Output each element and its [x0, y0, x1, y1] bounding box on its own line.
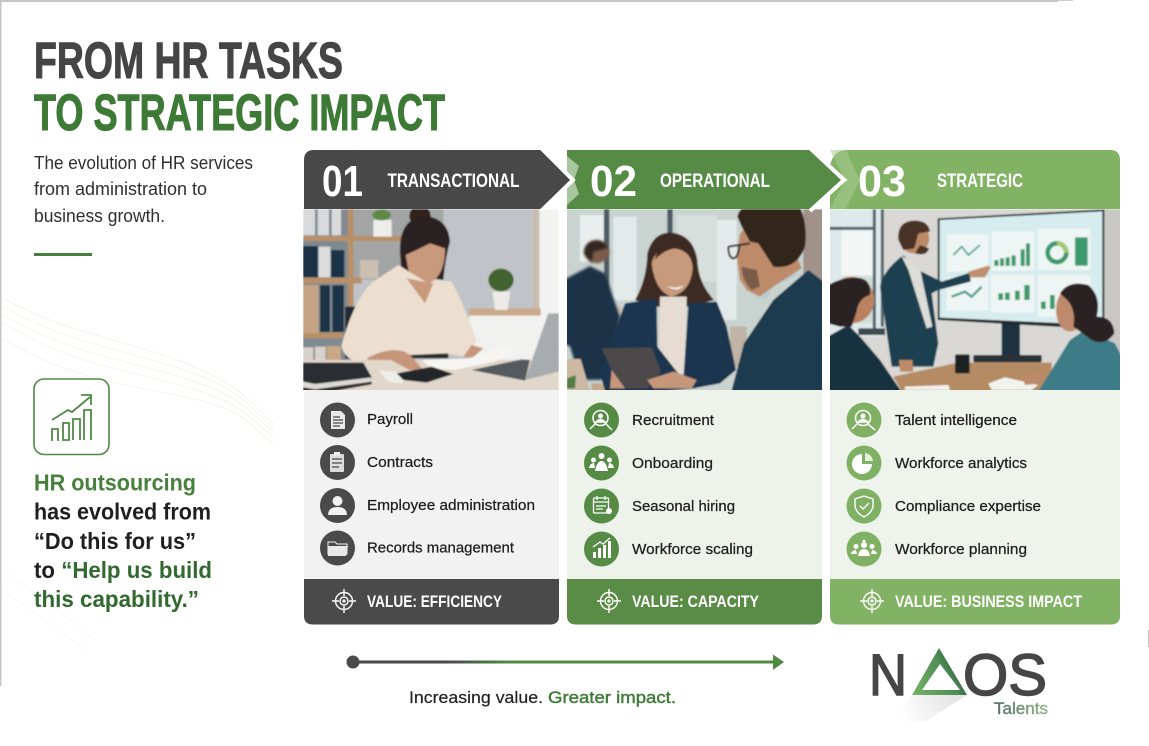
value bar 3 [830, 579, 1120, 624]
list: operational services: Workforce scaling [632, 541, 753, 558]
icon: records folder [320, 530, 355, 566]
caption: increasing value: Greater impact. [548, 688, 676, 707]
icon: analytics pie [846, 446, 882, 480]
icon: workforce scaling [584, 532, 619, 566]
value bar 3: VALUE: BUSINESS IMPACT [895, 592, 1083, 611]
panel: 01 transactional [295, 148, 573, 624]
callout: evolution quote: has evolved from [34, 498, 211, 524]
logo: NAOS Talents [869, 643, 1048, 722]
photo: interview with tablet [567, 209, 822, 390]
list: strategic services: Compliance expertise [895, 498, 1041, 515]
title [34, 32, 445, 141]
header 2: OPERATIONAL [660, 171, 770, 192]
list: strategic services: Workforce analytics [895, 455, 1027, 472]
value bar 1: VALUE: EFFICIENCY [367, 592, 503, 611]
body panel 3 [830, 389, 1120, 579]
subtitle [34, 153, 253, 226]
list: strategic services: Talent intelligence [895, 412, 1017, 429]
list: transactional services [320, 402, 535, 566]
photo: woman with calculator [303, 209, 559, 390]
header 2 [567, 148, 844, 211]
list: strategic services: Workforce planning [895, 541, 1027, 558]
list: transactional services: Contracts [367, 454, 433, 471]
accent rule [34, 253, 92, 256]
subtitle: business growth. [34, 206, 165, 226]
arrow: increasing value [346, 654, 784, 670]
panel: 03 strategic [822, 150, 1128, 624]
callout: evolution quote: HR outsourcing [34, 470, 196, 496]
background wave lines [2, 298, 274, 650]
value bar 1 [304, 579, 559, 624]
header 3: 03 [858, 157, 906, 206]
header 3 [830, 150, 1120, 209]
icon: talent intelligence [846, 402, 882, 438]
list: operational services [584, 402, 753, 566]
panel: 02 operational [557, 148, 844, 624]
logo: NAOS Talents: Talents [994, 699, 1048, 718]
list: operational services: Onboarding [632, 455, 713, 472]
header 2: 02 [590, 157, 637, 206]
callout: evolution quote: this capability.” [34, 586, 199, 612]
icon: onboarding team [584, 446, 619, 480]
body panel 1 [304, 389, 559, 579]
list: operational services: Seasonal hiring [632, 498, 735, 515]
value bar 2 [567, 579, 822, 624]
header 3: STRATEGIC [937, 171, 1023, 192]
value bar 2: VALUE: CAPACITY [632, 592, 760, 611]
title: TO STRATEGIC IMPACT [34, 84, 445, 141]
header 1 [304, 148, 573, 211]
subtitle: The evolution of HR services [34, 153, 253, 173]
icon: compliance shield [846, 488, 882, 524]
header 1: 01 [322, 157, 363, 206]
logo: NAOS Talents: N [869, 643, 907, 708]
icon: contracts clipboard [320, 445, 355, 480]
icon: workforce planning [846, 532, 882, 566]
caption: increasing value [409, 688, 676, 707]
callout: evolution quote: “Do this for us” [34, 528, 196, 554]
list: transactional services: Payroll [367, 411, 413, 428]
icon: employee person [320, 488, 355, 523]
caption: increasing value: Increasing value. [409, 688, 543, 707]
body panel 2 [567, 389, 822, 579]
list: strategic services [846, 402, 1041, 566]
header 1: TRANSACTIONAL [388, 171, 520, 192]
subtitle: from administration to [34, 179, 207, 199]
title: FROM HR TASKS [34, 32, 343, 89]
list: transactional services: Records management [367, 540, 515, 556]
icon: recruitment search [584, 402, 619, 438]
icon: seasonal calendar [584, 488, 619, 524]
list: operational services: Recruitment [632, 412, 715, 429]
icon: growth chart [34, 379, 109, 454]
icon: payroll document [320, 402, 355, 438]
photo: presenter at dashboard screen [830, 209, 1120, 390]
logo: NAOS Talents: OS [963, 643, 1047, 708]
callout: evolution quote [34, 470, 212, 612]
callout: evolution quote: to “Help us build [34, 557, 212, 583]
list: transactional services: Employee administration [367, 497, 535, 514]
